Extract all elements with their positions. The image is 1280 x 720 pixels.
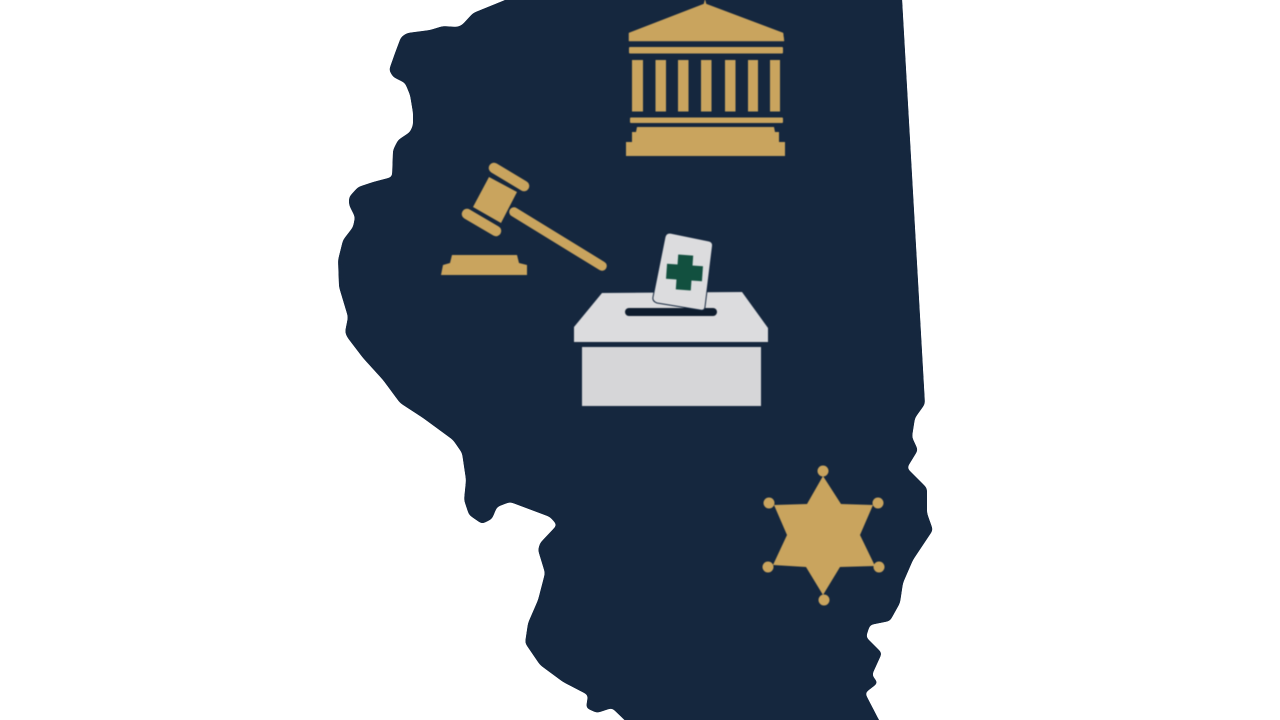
courthouse roof	[629, 0, 784, 41]
gavel head	[473, 177, 517, 223]
icon: sheriff star badge	[762, 466, 884, 606]
gavel handle	[514, 212, 602, 266]
ballot green cross	[665, 254, 704, 291]
icon: gavel	[441, 168, 602, 275]
gavel lower cap	[467, 214, 496, 231]
gavel upper cap	[494, 168, 524, 186]
star tip balls	[762, 466, 884, 606]
courthouse entablature	[629, 47, 783, 54]
ballot box body	[582, 347, 761, 406]
ballot box lid	[574, 292, 768, 342]
ballot paper	[653, 233, 713, 310]
icon: courthouse	[626, 0, 785, 156]
ballot slot	[625, 308, 717, 316]
gavel sound block	[441, 255, 527, 275]
courthouse columns	[632, 60, 780, 112]
star body	[773, 476, 875, 595]
courthouse stepped base	[626, 127, 785, 156]
map: Illinois state silhouette	[338, 0, 933, 720]
courthouse lower band	[630, 118, 783, 123]
icon: ballot box	[574, 233, 768, 406]
